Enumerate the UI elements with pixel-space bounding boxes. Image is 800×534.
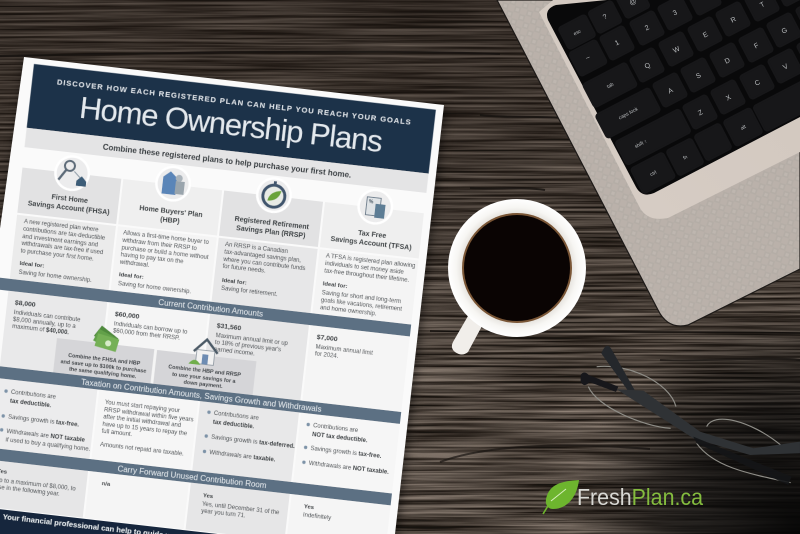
contribution: TFSA: Maximum annual limit [315,344,373,357]
description: A new registered plan where [24,219,99,234]
ideal for detail: Saving for retirement. [221,286,278,298]
keyboard keys: fn [682,154,689,162]
description: A TFSA is registered plan allowing [326,253,416,270]
contribution: HBP: Individuals can borrow up to [113,321,188,336]
paper [0,57,444,534]
carry forward: TFSA [303,504,332,522]
heading: Savings Plan (RRSP) [236,225,306,240]
keyboard keys: Z [697,109,705,117]
keyboard keys: T [759,1,767,9]
contribution: FHSA [12,300,83,338]
panel: HBP [116,161,219,297]
section band: taxation [0,364,401,424]
text: Contributions are [11,390,57,401]
logo: FreshPlan.ca [543,480,704,514]
keyboard keys: D [724,57,732,66]
infographic sheet [0,57,444,534]
text: tax deductible. [212,420,255,430]
description: individuals to set money aside [325,261,405,276]
description: having to pay tax on the [120,252,184,266]
description: purchase or build a home without [121,245,209,261]
callout: HBP and RRSP: to use your savings for a [172,372,237,385]
taxation: HBP: after the initial withdrawal and [103,414,181,429]
ideal for detail: Saving for home ownership. [18,270,92,284]
icon: house documents [153,164,193,204]
keyboard well [547,0,800,195]
keyboard keys: W [672,46,682,55]
callout: HBP and RRSP: Combine the HBP and RRSP [168,364,242,379]
text: Savings growth is tax-free. [310,446,382,460]
keyboard keys: ? [602,13,609,21]
keyboard keys: A [667,87,675,96]
coffee mug [448,199,586,354]
bullets [302,423,310,464]
heading: Savings Account (TFSA) [330,236,412,252]
header banner [27,64,436,174]
contribution: HBP: $60,000 from their RRSP. [113,328,180,342]
heading: (HBP) [160,216,180,226]
text: NOT tax deductible. [312,432,368,444]
keyboard keys: C [754,79,762,88]
heading: First Home [51,194,88,205]
taxation: FHSA [0,389,96,453]
contribution: FHSA: Individuals can contribute [13,310,81,324]
description: withdrawal. [118,260,150,269]
keyboard keys: 3 [672,9,679,17]
taxation: HBP: have up to 15 years to repay the [102,422,188,437]
description: withdraw from their RRSP to [121,238,198,252]
contribution: HBP [113,311,189,343]
keyboard keys: E [702,31,710,40]
mug handle [452,316,482,354]
keyboard keys: 2 [644,24,651,32]
contribution: TFSA: $7,000 [316,334,338,343]
taxation: HBP: Amounts not repaid are taxable. [100,442,184,458]
callout: FHSA and HBP: and save up to $100k to purchase [60,359,147,375]
description: withdrawals are tax-free if used [20,241,103,256]
eyeglasses [581,346,800,485]
icon: tax form and calculator: % [368,199,374,206]
taxation: HBP: You must start repaying your [105,400,180,414]
keyboard keys: X [725,94,733,103]
mug rim [448,199,586,337]
taxation: RRSP [202,410,298,466]
heading: Tax Free [358,230,387,240]
section band: carry forward: Carry Forward Unused Contribution Room [117,464,267,490]
section band: current contribution amounts: Current Contribution Amounts [158,298,264,319]
ideal for detail: goals like vacations, retirement [320,298,403,313]
taxation: HBP: full amount. [101,429,133,438]
ideal for: Ideal for: [222,278,247,287]
carry forward: RRSP [201,493,281,523]
eyebrow heading: DISCOVER HOW EACH REGISTERED PLAN CAN HELP YOU REACH YOUR GOALS [56,77,411,127]
section band: taxation: Taxation on Contribution Amounts, Savings Growth and Withdrawals [81,378,322,414]
text: Withdrawals are taxable. [209,450,276,464]
bullets [0,389,8,432]
keyboard keys: caps lock [618,106,640,121]
keyboard keys: G [781,27,789,36]
description: to purchase your first home. [20,248,94,263]
keyboard keys: alt [740,124,748,132]
ideal for: Ideal for: [119,272,144,281]
carry forward: TFSA: Yes [304,504,315,511]
text: Savings growth is tax-deferred. [211,435,295,450]
keyboard keys: tab [606,82,615,90]
keyboard keys: esc [573,28,583,37]
carry forward: RRSP: year you turn 71. [201,508,246,520]
taxation: TFSA [302,422,394,476]
panel: RRSP [219,172,315,301]
contribution: RRSP [214,323,290,361]
wordmark: FreshPlan.ca [577,484,704,510]
description: tax-advantaged savings plan, [224,249,302,264]
text: Contributions are [313,423,359,434]
heading: Home Buyers' Plan [139,205,203,219]
taxation: HBP: RRSP withdrawal within five years [104,407,194,423]
text: Contributions are [213,411,260,422]
carry forward: HBP: n/a [101,481,111,488]
ideal for: Ideal for: [19,261,45,270]
contribution: RRSP: Maximum annual limit or up [215,333,289,347]
icon: key and house fob [52,153,92,193]
contribution: RRSP: earned income. [214,347,255,358]
callout: FHSA and HBP: the same qualifying home. [69,367,137,380]
text: Withdrawals are NOT taxable. [308,461,389,476]
icon: green money bills [92,325,121,352]
text: Savings growth is tax-free. [8,415,79,429]
contribution: FHSA: $8,000 annually, up to a [13,317,77,330]
callout: HBP and RRSP: down payment. [183,380,223,390]
contribution: RRSP: to 18% of previous year's [215,340,281,353]
ideal for detail: Saving for short and long-term [321,290,401,305]
keyboard keys: 1 [614,39,621,47]
footer banner [0,505,385,534]
contribution: FHSA: $8,000 [14,300,36,309]
section band: carry forward [0,446,392,505]
column backgrounds [0,165,424,534]
contribution: TFSA: for 2024. [315,351,339,360]
carry forward: FHSA [0,469,78,500]
contribution: TFSA [315,334,375,364]
description: where you can contribute funds [222,257,306,272]
text: tax deductible. [10,399,52,409]
keyboard keys: S [695,72,703,81]
description: An RRSP is a Canadian [225,242,288,255]
callout: HBP and RRSP [153,350,256,395]
contribution: HBP: $60,000 [115,311,140,321]
laptop [497,0,800,326]
description: and investment earnings and [22,234,98,248]
panel: FHSA [17,150,116,285]
bullets [203,410,211,453]
palm rest lip [539,0,800,219]
keyboard keys: ctrl [649,170,658,178]
callout: FHSA and HBP: Combine the FHSA and HBP [68,353,141,367]
keyboard keys: shift ↑ [634,139,648,150]
carry forward: RRSP: Yes [203,493,214,500]
icon: compass with leaf [254,175,294,215]
heading: Registered Retirement [234,216,310,231]
keyboard keys: Q [644,62,652,71]
heading: Savings Account (FHSA) [27,200,110,217]
text: Withdrawals are NOT taxable [6,429,85,444]
description: for future needs. [222,264,266,275]
icon: house [188,338,219,367]
paper shadow [0,60,446,534]
keyboard keys [558,0,800,194]
keyboard keys: V [782,63,790,72]
contribution: FHSA: maximum of $40,000. [12,324,69,336]
description: tax-free throughout their lifetime. [324,268,410,284]
ideal for detail: Saving for home ownership. [118,281,192,295]
panel: TFSA [320,184,424,321]
ideal for: Ideal for: [322,281,348,290]
main title: Home Ownership Plans [78,90,385,159]
carry forward: TFSA: Indefinitely [303,513,331,522]
description: contributions are tax-deductible [23,226,106,242]
keyboard keys: R [730,16,738,25]
text: if used to buy a qualifying home. [5,437,91,453]
keyboard keys: F [753,42,760,50]
callout: FHSA and HBP [53,338,154,383]
subtitle band [24,128,429,193]
subtitle band: Combine these registered plans to help purchase your first home. [102,142,352,180]
section band: current contribution amounts [0,277,411,336]
contribution: RRSP: $31,560 [216,323,242,332]
keyboard keys: ~ [585,54,592,62]
carry forward: RRSP: Yes, until December 31 of the [202,502,280,516]
coffee surface [462,213,572,323]
ideal for detail: and home ownership. [320,305,377,317]
taxation: HBP [100,400,195,458]
icon: green leaf [543,480,579,514]
description: Allows a first-time home buyer to [123,230,210,246]
laptop body with woven texture [497,0,800,326]
